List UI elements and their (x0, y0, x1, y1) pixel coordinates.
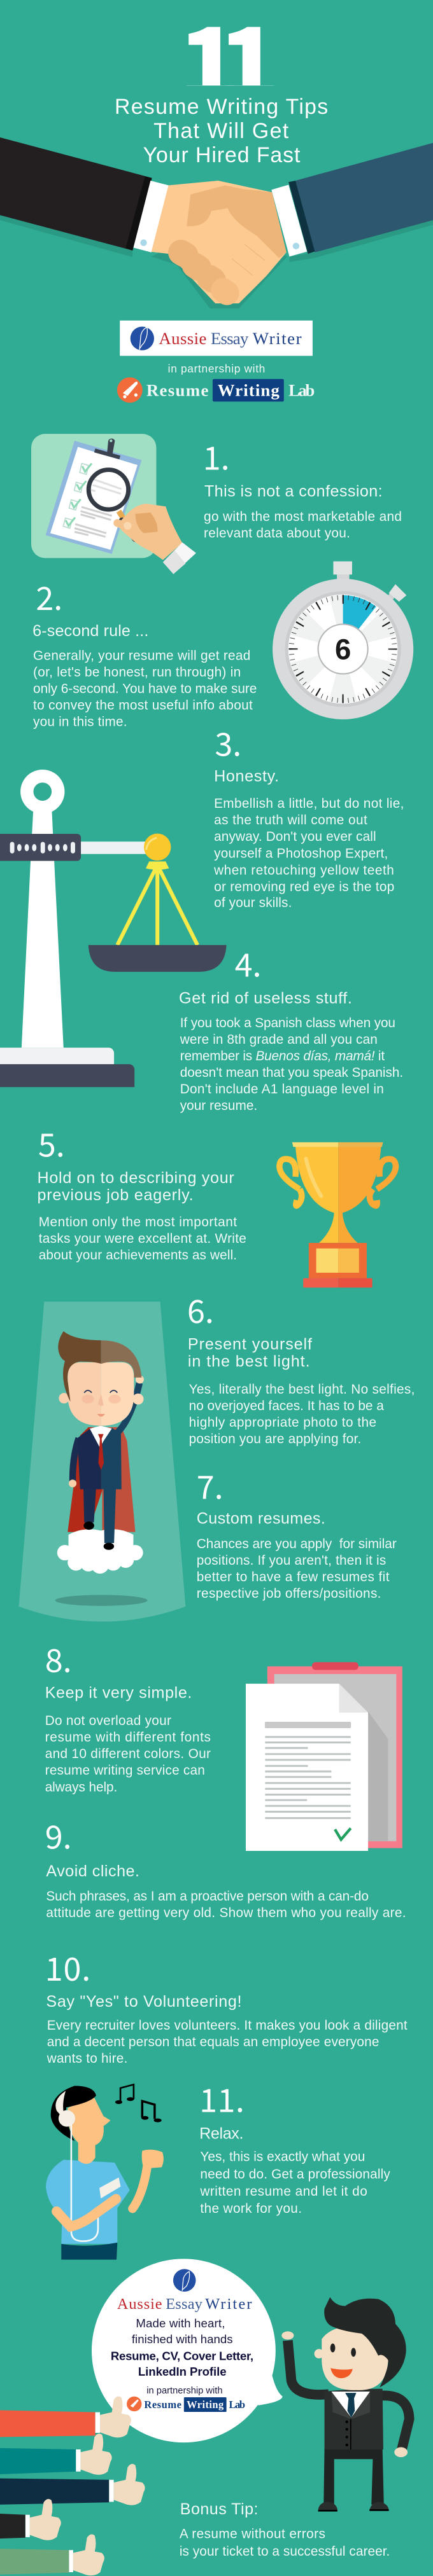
tip 8 heading: Keep it very simple. (45, 1684, 192, 1702)
speech bubble with logos: Made with heart, (136, 2316, 225, 2330)
speech bubble with logos: Aussie (117, 2296, 162, 2313)
title: Your Hired Fast (143, 143, 301, 167)
tip 3 body: as the truth will come out (214, 813, 367, 828)
tip 6 body: position you are applying for. (189, 1432, 361, 1446)
tip 4 body: remember is Buenos días, mamá! it (180, 1049, 385, 1063)
title (115, 95, 328, 167)
tip 6 heading: in the best light. (188, 1352, 310, 1370)
tip 11 body: written resume and let it do (199, 2184, 367, 2199)
speech bubble with logos: Resume, CV, Cover Letter, (111, 2350, 253, 2363)
tip 10 body (46, 2018, 408, 2066)
tip 10 number: 10. (45, 1944, 90, 1990)
tip 7 body: better to have a few resumes fit (197, 1570, 390, 1584)
tip 2 body: to convey the most useful info about (33, 698, 253, 712)
tip 8 number: 8. (45, 1636, 72, 1682)
tip 11 body (199, 2149, 390, 2216)
tip 1 body: relevant data about you. (204, 526, 350, 541)
panel: closing section (0, 2259, 409, 2575)
tip 4 body: were in 8th grade and all you can (180, 1032, 378, 1047)
tip 3 body: yourself a Photoshop Expert, (214, 846, 388, 861)
tip 11 body: need to do. Get a professionally (200, 2167, 390, 2182)
tip 5 body: about your achievements as well. (39, 1248, 237, 1263)
tip 10 body: Every recruiter loves volunteers. It makes you look a diligent (47, 2018, 408, 2033)
tip 7 body: respective job offers/positions. (197, 1586, 381, 1601)
tip 9 heading: Avoid cliche. (46, 1862, 139, 1880)
tip 5 body (39, 1215, 246, 1263)
bonus tip heading: Bonus Tip: (180, 2500, 258, 2518)
tip 11 body: the work for you. (200, 2201, 302, 2216)
tip 9 number: 9. (45, 1812, 72, 1858)
tip 8 body: Do not overload your (45, 1714, 171, 1728)
speech bubble with logos (92, 2259, 283, 2442)
tip 9 body: attitude are getting very old. Show them who you really are. (46, 1906, 406, 1920)
tip 2 number: 2. (36, 574, 62, 620)
logo: Resume Writing Lab: Lab (288, 380, 315, 399)
tip 3 heading: Honesty. (214, 768, 279, 786)
tip 2 body: only 6-second. You have to make sure (33, 681, 257, 696)
panel: tip 1, 2 and start of tip 3 (31, 434, 413, 786)
tip 5 number: 5. (38, 1120, 65, 1166)
speech bubble with logos: Writer (205, 2296, 252, 2313)
tip 6 body (189, 1382, 415, 1446)
tip 11 body: Yes, this is exactly what you (200, 2149, 365, 2164)
icon: gold trophy (280, 1142, 395, 1287)
tip 1 number: 1. (203, 434, 230, 480)
tip 8 body: always help. (45, 1780, 117, 1794)
logo: Aussie Essay Writer: Essay (211, 329, 249, 348)
tip 4 heading: Get rid of useless stuff. (179, 990, 352, 1008)
tip 2 body: you in this time. (33, 714, 127, 729)
logo: Aussie Essay Writer: Aussie (159, 329, 206, 348)
tip 7 number: 7. (197, 1463, 224, 1509)
bonus tip body: is your ticket to a successful career. (180, 2544, 390, 2559)
title: That Will Get (153, 119, 289, 143)
illustration: handshake (0, 137, 433, 308)
tip 2 body: (or, let's be honest, run through) in (33, 665, 241, 679)
illustration: businessman waving (281, 2297, 409, 2510)
tip 4 body: doesn't mean that you speak Spanish. (180, 1065, 403, 1080)
logo: Resume Writing Lab: Resume (146, 380, 208, 399)
tip 1 body (204, 509, 402, 541)
panel: tip 9, 10 and 11 (45, 1812, 408, 2260)
tip 9 body (46, 1889, 406, 1920)
logo: Resume Writing Lab: Writing (218, 380, 280, 399)
tip 4 body (180, 1016, 403, 1113)
tip 7 body (197, 1537, 397, 1601)
tip 3 body (213, 796, 404, 910)
speech bubble with logos: LinkedIn Profile (138, 2365, 227, 2378)
tip 6 body: no overjoyed faces. It has to be a (189, 1399, 384, 1413)
title number (186, 27, 274, 85)
tip 2 heading: 6-second rule ... (32, 622, 148, 640)
illustration: man in cape under spotlight (18, 1302, 185, 1622)
speech bubble with logos: Essay (166, 2296, 203, 2313)
tip 2 body: Generally, your resume will get read (33, 648, 250, 663)
speech bubble with logos: Writing (187, 2399, 224, 2411)
tip 5 heading: Hold on to describing your (38, 1169, 234, 1187)
tip 4 number: 4. (235, 941, 262, 987)
tip 6 number: 6. (187, 1287, 214, 1333)
tip 8 body: and 10 different colors. Our (45, 1747, 211, 1761)
speech bubble with logos: in partnership with (146, 2386, 223, 2396)
tip 4 body: Don't include A1 language level in (180, 1082, 384, 1097)
tip 10 body: wants to hire. (46, 2051, 127, 2066)
tip 10 body: and a decent person that equals an employee everyone (47, 2035, 379, 2049)
header: title and logos (0, 0, 433, 403)
tip 3 body: anyway. Don't you ever call (214, 829, 376, 844)
tip 9 body: Such phrases, as I am a proactive person with a can-do (46, 1889, 369, 1904)
tip 3 body: Embellish a little, but do not lie, (214, 796, 404, 811)
speech bubble with logos: finished with hands (132, 2332, 233, 2346)
logo: Aussie Essay Writer: Writer (253, 329, 302, 348)
title: Resume Writing Tips (115, 95, 328, 119)
illustration: balance scale (0, 770, 227, 1087)
logo: Aussie Essay Writer (120, 321, 313, 356)
tip 10 heading: Say "Yes" to Volunteering! (46, 1993, 241, 2011)
speech bubble with logos: Lab (229, 2399, 245, 2411)
logo: Resume Writing Lab (117, 377, 315, 403)
icon: clipboard and magnifier (31, 434, 196, 574)
tip 8 body: resume with different fonts (45, 1730, 211, 1745)
tip 7 heading: Custom resumes. (197, 1510, 325, 1528)
tip 2 body (33, 648, 257, 729)
tip 6 body: highly appropriate photo to the (189, 1415, 376, 1430)
tip 3 number: 3. (215, 719, 241, 765)
tip 3 body: or removing red eye is the top (214, 880, 394, 894)
tip 11 number: 11. (199, 2076, 245, 2122)
tip 6 body: Yes, literally the best light. No selfies, (189, 1382, 415, 1397)
tip 1 body: go with the most marketable and (204, 509, 402, 524)
tip 7 body: positions. If you aren't, then it is (197, 1553, 386, 1568)
tip 3 body: of your skills. (214, 896, 292, 910)
icon: stopwatch showing 6 seconds: 6 (335, 633, 351, 665)
tip 3 body: when retouching yellow teeth (213, 863, 394, 878)
tip 7 body: Chances are you apply for similar (197, 1537, 397, 1551)
panel: tip 4 and 5 (38, 941, 403, 1287)
tip 4 body: If you took a Spanish class when you (180, 1016, 395, 1030)
tip 6 heading (188, 1336, 313, 1370)
tip 1 heading: This is not a confession: (204, 483, 383, 501)
tip 11 heading: Relax. (199, 2125, 243, 2143)
tip 8 body (45, 1714, 211, 1794)
tip 8 body: resume writing service can (45, 1763, 205, 1778)
tip 5 heading: previous job eagerly. (38, 1186, 194, 1204)
illustration: man with headphones listening to music (46, 2084, 164, 2260)
tip 5 body: Mention only the most important (39, 1215, 237, 1229)
icon: stopwatch showing 6 seconds (273, 562, 413, 719)
speech bubble with logos: Resume (144, 2399, 181, 2411)
tip 6 heading: Present yourself (188, 1336, 313, 1354)
illustration: resume on pink clipboard (246, 1662, 402, 1851)
tip 5 heading (38, 1169, 234, 1204)
text: in partnership with: in partnership with (168, 362, 265, 375)
bonus tip body: A resume without errors (180, 2527, 325, 2542)
panel: tip 6, 7 and start of tip 8 (18, 1287, 415, 1851)
tip 5 body: tasks your were excellent at. Write (39, 1231, 246, 1246)
tip 4 body: your resume. (180, 1098, 257, 1113)
illustration: thumbs-up hands (0, 2397, 145, 2575)
bonus tip body (180, 2527, 390, 2559)
